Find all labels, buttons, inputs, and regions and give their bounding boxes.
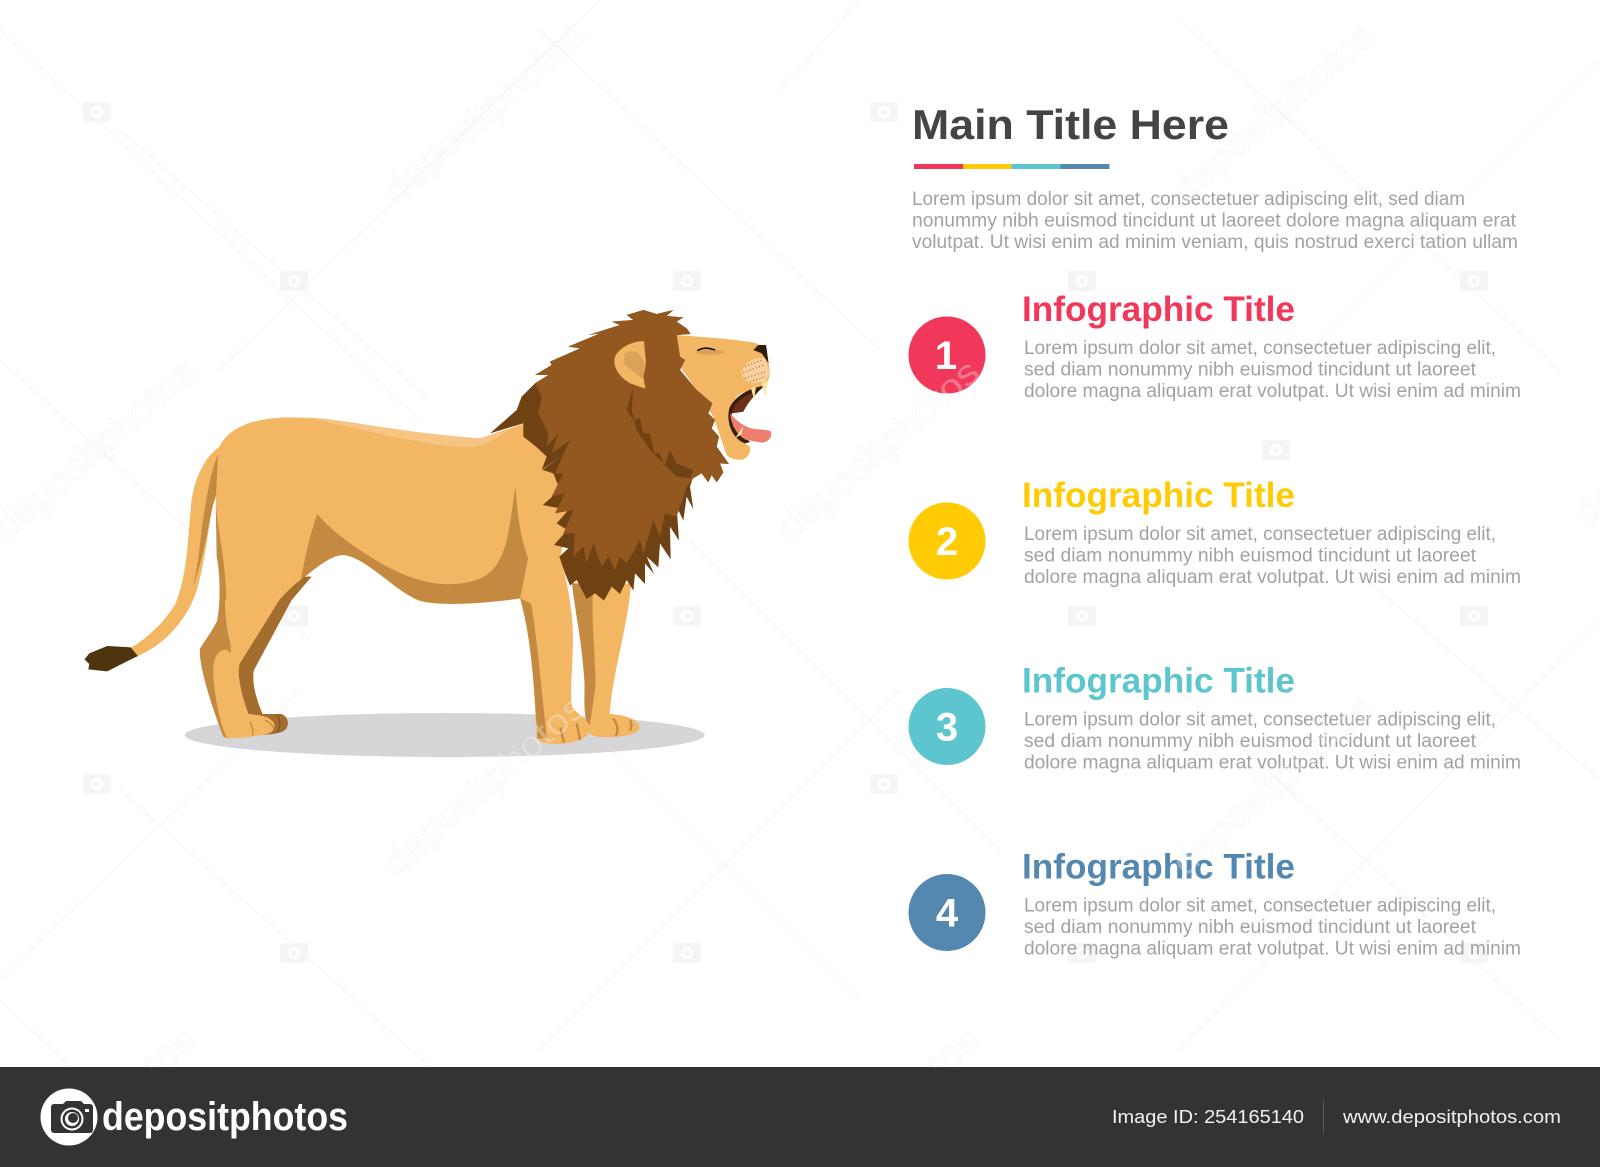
intro text — [912, 189, 1518, 253]
illustration: roaring lion — [85, 310, 771, 757]
front paw toes — [560, 718, 631, 743]
mane inner crease — [627, 387, 693, 478]
teeth — [735, 380, 768, 438]
number badge 4: 4 — [936, 892, 959, 936]
lion body and tail — [85, 417, 639, 744]
item 2 — [908, 476, 1521, 588]
item 4 text: sed diam nonummy nibh euismod tincidunt ut laoreet — [1024, 917, 1477, 938]
face — [677, 335, 770, 460]
item 2 heading: Infographic Title — [1022, 476, 1295, 515]
watermark text: depositphotos — [1164, 14, 1382, 211]
brow shade — [695, 349, 725, 355]
muzzle — [742, 358, 770, 383]
nose — [753, 345, 769, 363]
hind paw toes — [250, 720, 273, 736]
hind leg — [200, 600, 280, 739]
item 2 text — [1024, 524, 1521, 588]
number badge 1 — [908, 316, 986, 394]
belly shade — [301, 486, 528, 604]
mane dark layer — [490, 310, 729, 601]
front leg shade — [520, 598, 547, 738]
thigh shade — [213, 503, 226, 637]
number badge 3: 3 — [936, 706, 958, 750]
intro text: Lorem ipsum dolor sit amet, consectetuer adipiscing elit, sed diam — [912, 189, 1465, 210]
item 3 text: sed diam nonummy nibh euismod tincidunt ut laoreet — [1024, 731, 1477, 752]
item 2 text: dolore magna aliquam erat volutpat. Ut wisi enim ad minim — [1024, 567, 1521, 588]
item 2 text: Lorem ipsum dolor sit amet, consectetuer adipiscing elit, — [1024, 524, 1496, 545]
colour underline — [914, 164, 1110, 169]
torso — [216, 417, 590, 744]
item 2 text: sed diam nonummy nibh euismod tincidunt ut laoreet — [1024, 546, 1477, 566]
far front leg shade — [572, 583, 596, 731]
muzzle and mouth — [695, 345, 771, 443]
ear — [614, 341, 646, 389]
item 1 text: sed diam nonummy nibh euismod tincidunt ut laoreet — [1024, 360, 1477, 380]
outer leg shade — [200, 600, 233, 739]
far hind leg — [230, 577, 312, 735]
item 3 text: dolore magna aliquam erat volutpat. Ut wisi enim ad minim — [1024, 752, 1521, 774]
item 1 text — [1024, 338, 1521, 402]
closed eye — [697, 348, 715, 351]
far front leg — [572, 583, 639, 737]
intro text: volutpat. Ut wisi enim ad minim veniam, quis nostrud exerci tation ullam — [912, 232, 1518, 253]
ground shadow — [185, 713, 705, 757]
footer bar — [0, 1067, 1600, 1167]
watermark text: depositphotos — [375, 686, 593, 883]
lion head and mane — [490, 310, 770, 601]
tail shade — [193, 450, 223, 587]
mouth interior — [728, 386, 764, 443]
mane main layer — [535, 310, 729, 570]
watermark text: depositphotos — [769, 351, 987, 548]
item 3 heading: Infographic Title — [1022, 662, 1295, 700]
item 1 text: dolore magna aliquam erat volutpat. Ut wisi enim ad minim — [1024, 381, 1521, 402]
number badge 4 — [908, 874, 986, 951]
item 4 text — [1024, 896, 1521, 960]
main title: Main Title Here — [912, 101, 1229, 148]
item 3 text — [1024, 710, 1521, 774]
item 4 heading: Infographic Title — [1022, 848, 1295, 886]
item 3 — [908, 662, 1521, 774]
item 3 text: Lorem ipsum dolor sit amet, consectetuer adipiscing elit, — [1024, 710, 1496, 730]
number badge 2 — [908, 502, 986, 580]
tail — [130, 445, 223, 656]
item 1 heading: Infographic Title — [1022, 290, 1295, 329]
item 1 text: Lorem ipsum dolor sit amet, consectetuer adipiscing elit, — [1024, 338, 1496, 359]
logo icon: camera — [40, 1088, 98, 1146]
near hind leg — [213, 600, 279, 738]
inner ear — [623, 351, 645, 379]
item 4 text: Lorem ipsum dolor sit amet, consectetuer adipiscing elit, — [1024, 896, 1496, 916]
item 4 text: dolore magna aliquam erat volutpat. Ut wisi enim ad minim — [1024, 938, 1521, 960]
item 1 — [908, 290, 1521, 402]
item 4 — [908, 848, 1521, 960]
whisker dots — [743, 360, 765, 382]
watermark text: depositphotos — [1164, 686, 1382, 883]
tail tuft — [85, 646, 138, 671]
intro text: nonummy nibh euismod tincidunt ut laoreet dolore magna aliquam erat — [912, 210, 1517, 232]
number badge 2: 2 — [936, 520, 958, 564]
back highlight — [305, 417, 508, 447]
image id: Image ID: 254165140 — [1112, 1106, 1304, 1127]
tongue — [730, 413, 771, 443]
logo wordmark: depositphotos — [102, 1095, 348, 1139]
number badge 1: 1 — [935, 334, 957, 378]
watermark text: depositphotos — [375, 14, 593, 211]
website: www.depositphotos.com — [1342, 1106, 1561, 1127]
number badge 3 — [908, 688, 986, 765]
